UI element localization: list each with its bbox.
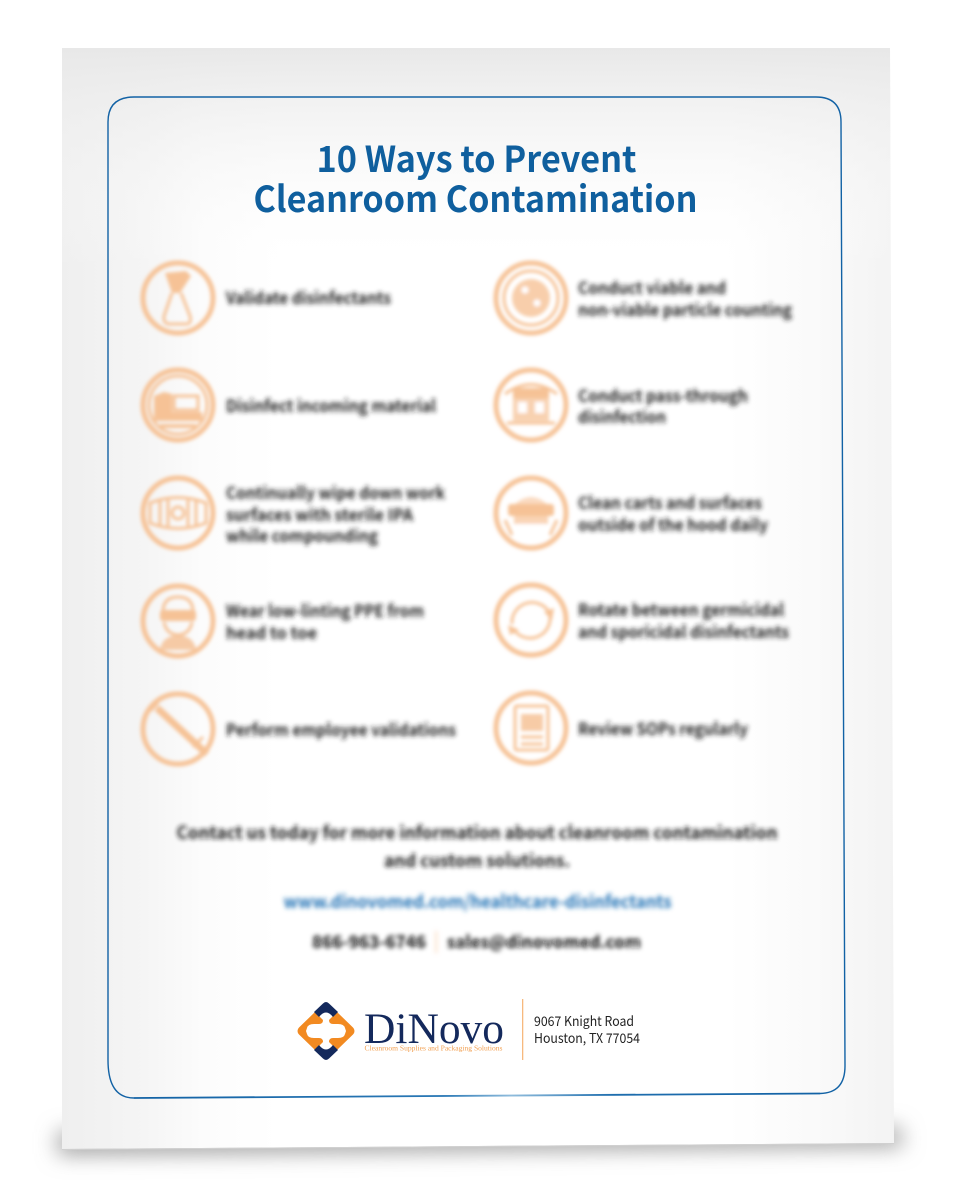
text: Wear low-linting PPE from — [226, 597, 424, 622]
address: Houston, TX 77054 — [534, 1027, 640, 1047]
phone and email: sales@dinovomed.com — [447, 928, 641, 953]
text: disinfection — [578, 403, 666, 428]
item: pass-through disinfection — [496, 370, 748, 440]
text — [578, 382, 748, 428]
icon: wipe — [143, 478, 213, 548]
text: Disinfect incoming material — [226, 392, 436, 417]
icon: particles — [496, 263, 566, 333]
icon: cart — [496, 478, 566, 548]
address divider — [522, 999, 523, 1060]
text: Review SOPs regularly — [578, 715, 748, 740]
title — [254, 131, 698, 223]
text: and sporicidal disinfectants — [578, 618, 789, 643]
text: outside of the hood daily — [578, 511, 768, 536]
icon: pass-through chamber — [496, 370, 566, 440]
logo: DiNovo — [298, 1002, 504, 1060]
icon: syringe — [143, 694, 213, 764]
tagline: Cleanroom Supplies and Packaging Solutions — [364, 1044, 503, 1052]
wordmark: DiNovo — [364, 1006, 504, 1053]
icon: document — [496, 693, 566, 763]
text: Validate disinfectants — [225, 284, 391, 309]
website link: www.dinovomed.com/healthcare-disinfectants — [284, 888, 672, 914]
sheet of paper — [62, 48, 894, 1150]
text: non-viable particle counting — [578, 296, 792, 321]
contact call to action — [176, 819, 778, 873]
address: 9067 Knight Road — [534, 1010, 634, 1030]
rounded blue frame — [108, 97, 845, 1098]
logo mark — [298, 1002, 354, 1060]
text: Continually wipe down work — [226, 479, 446, 504]
text — [578, 596, 789, 643]
contact call to action: Contact us today for more information about cleanroom contamination — [176, 819, 778, 845]
text — [578, 274, 792, 321]
text: surfaces with sterile IPA — [226, 501, 413, 526]
address — [534, 1010, 640, 1047]
phone and email — [312, 928, 641, 953]
text — [578, 489, 768, 536]
text — [226, 479, 446, 547]
text: Conduct viable and — [578, 274, 726, 299]
text: while compounding — [226, 522, 378, 547]
contact call to action: and custom solutions. — [384, 847, 570, 873]
icon: spray bottle — [143, 263, 213, 333]
item: rotate disinfectants — [496, 585, 789, 655]
text: Perform employee validations — [226, 716, 456, 741]
item: validate disinfectants — [143, 263, 391, 333]
item: review SOPs — [496, 693, 748, 763]
page shadow — [58, 1128, 903, 1154]
item: wipe down work surfaces — [143, 478, 446, 548]
icon: delivery truck — [143, 370, 213, 440]
item: employee validations — [143, 694, 456, 764]
text — [226, 597, 424, 644]
text: Rotate between germicidal — [578, 596, 784, 621]
title: 10 Ways to Prevent — [316, 131, 636, 183]
icon: rotate arrows — [496, 585, 566, 655]
title: Cleanroom Contamination — [254, 171, 698, 223]
phone and email: 866-963-6746 — [312, 928, 426, 953]
item: particle counting — [496, 263, 792, 333]
text: Conduct pass-through — [578, 382, 748, 407]
text: Clean carts and surfaces — [578, 489, 762, 514]
icon: person in PPE — [143, 586, 213, 656]
item: wear PPE — [143, 586, 424, 656]
text: head to toe — [226, 619, 317, 644]
item: clean carts and surfaces — [496, 478, 768, 548]
item: disinfect incoming material — [143, 370, 436, 440]
